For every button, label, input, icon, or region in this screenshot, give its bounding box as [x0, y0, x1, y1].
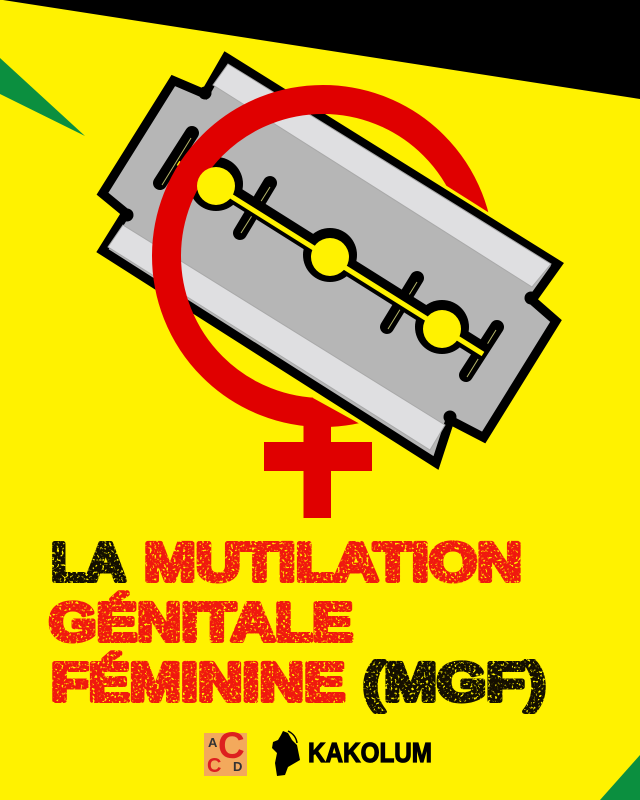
logo: ACCD: [204, 725, 247, 777]
title words: MUTILATION: MUTILATION: [144, 532, 522, 592]
title word: GÉNITALE: GÉNITALE: [49, 592, 353, 652]
upper bevel band: [213, 64, 551, 287]
title word: LA: LA: [51, 532, 126, 592]
icon: female symbol: [166, 100, 480, 518]
Africa head silhouette: [272, 731, 300, 776]
logo square: [204, 733, 247, 776]
logo letters: A: [208, 735, 218, 750]
logo: ACCD: C: [207, 755, 221, 777]
hair arc: [288, 731, 297, 743]
cross slots: [160, 133, 497, 375]
logo: KAKOLUM: [272, 731, 432, 776]
blade notches: [120, 86, 538, 424]
title: [49, 532, 546, 712]
title word: (MGF): (MGF): [363, 652, 546, 712]
symbol cross: [264, 415, 372, 518]
logo: ACCD: D: [233, 759, 242, 774]
green triangle bottom right: [600, 755, 640, 800]
slot highlights: [162, 138, 496, 377]
centre slot: [217, 184, 484, 352]
black top banner: [0, 0, 640, 99]
wordmark: KAKOLUM: [308, 737, 432, 768]
title word: FÉMININE: FÉMININE: [51, 652, 345, 712]
lower bevel band: [108, 225, 445, 450]
blade body: [102, 58, 558, 463]
symbol ring: [166, 100, 480, 412]
green triangle top left: [0, 58, 85, 136]
icon: razor blade: [102, 58, 558, 463]
blade hole over ring: [197, 167, 235, 205]
logo: ACCD: C: [218, 725, 245, 766]
